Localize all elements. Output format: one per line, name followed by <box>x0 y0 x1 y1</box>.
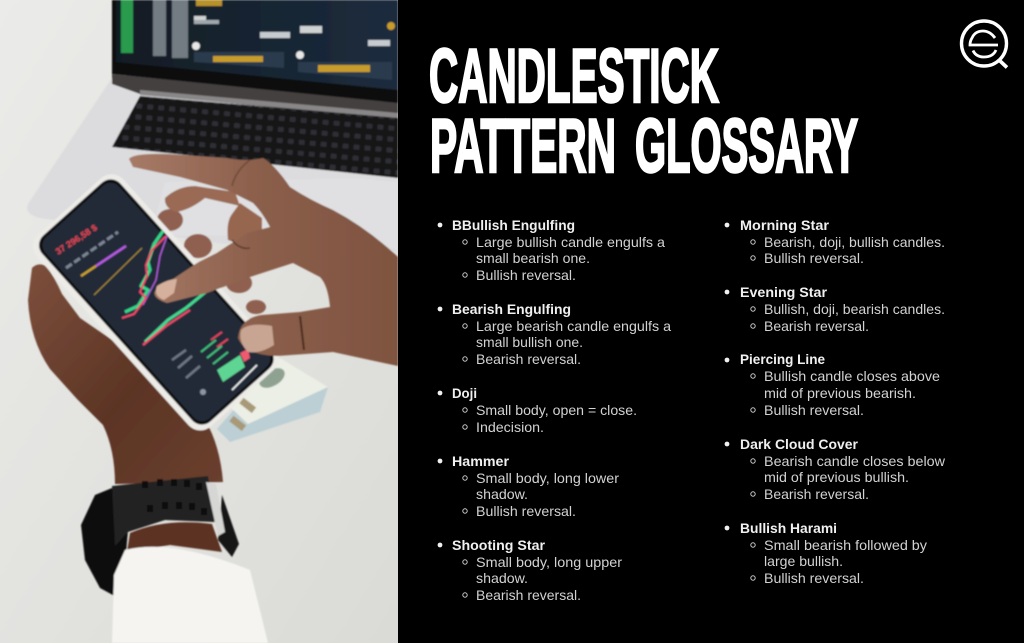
phone indicator labels <box>81 266 96 276</box>
entry: Bearish Engulfing: Bearish reversal. <box>476 351 581 367</box>
entry: Hammer <box>438 453 619 519</box>
entry: Bullish Harami: Small bearish followed by <box>764 537 927 553</box>
phone candlestick chart <box>94 231 208 345</box>
entry: Dark Cloud Cover: mid of previous bullish. <box>764 469 909 485</box>
entry: Bearish Engulfing: small bullish one. <box>476 334 583 350</box>
entry: Bullish Engulfing: small bearish one. <box>476 250 590 266</box>
entry: Bullish Engulfing: Large bullish candle engulfs a <box>476 234 665 250</box>
entry: Bullish Engulfing: Bullish reversal. <box>476 267 576 283</box>
entry: Dark Cloud Cover <box>725 436 946 502</box>
watch case and strap <box>81 476 239 600</box>
entry: Bullish Harami: Bullish reversal. <box>764 570 864 586</box>
entry: Shooting Star: Bearish reversal. <box>476 587 581 603</box>
entry: Bearish Engulfing <box>438 301 671 367</box>
title: CANDLESTICK <box>429 34 719 119</box>
entry: Bullish Harami <box>725 520 927 586</box>
phone order rows <box>201 332 228 364</box>
entry: Evening Star: Bearish reversal. <box>764 318 869 334</box>
entry: Dark Cloud Cover: Bearish candle closes below <box>764 453 946 469</box>
entry: Bearish Engulfing: Large bearish candle engulfs a <box>476 318 671 334</box>
entry: Bullish Engulfing <box>438 217 665 283</box>
logo: S and Q magnifier mark <box>962 21 1007 68</box>
entry: Doji: Doji <box>452 385 477 401</box>
entry: Hammer: Hammer <box>452 453 510 469</box>
entry: Hammer: Bullish reversal. <box>476 503 576 519</box>
phone buy button <box>217 355 245 382</box>
entry: Shooting Star <box>438 537 622 603</box>
desk surface <box>0 0 398 643</box>
title <box>429 34 858 189</box>
right hand with fingers on phone <box>129 154 398 366</box>
photo: hands holding phone in front of laptop <box>0 0 398 643</box>
entry: Shooting Star: shadow. <box>476 570 528 586</box>
entry: Bearish Engulfing: Bearish Engulfing <box>452 301 571 317</box>
phone toolbar labels <box>66 232 118 268</box>
left glossary column <box>438 217 671 603</box>
background fingers behind phone <box>157 209 266 314</box>
entry: Bullish Harami: large bullish. <box>764 553 843 569</box>
entry: Morning Star: Bearish, doji, bullish candles. <box>764 234 945 250</box>
right glossary column <box>725 217 946 586</box>
entry: Shooting Star: Shooting Star <box>452 537 546 553</box>
entry: Piercing Line <box>725 351 940 418</box>
phone <box>38 174 280 432</box>
banknotes <box>217 358 328 442</box>
left hand <box>28 264 223 484</box>
phone footer labels <box>172 350 200 378</box>
entry: Evening Star: Evening Star <box>740 284 828 300</box>
title: PATTERN <box>430 104 616 189</box>
entry: Piercing Line: Bullish candle closes above <box>764 368 940 384</box>
entry: Hammer: Small body, long lower <box>476 470 619 486</box>
entry: Doji: Indecision. <box>476 419 544 435</box>
entry: Bullish Engulfing: BBullish Engulfing <box>452 217 575 233</box>
white shirt sleeve <box>112 547 268 643</box>
entry: Piercing Line: Bullish reversal. <box>764 402 864 418</box>
entry: Dark Cloud Cover: Bearish reversal. <box>764 486 869 502</box>
entry: Doji: Small body, open = close. <box>476 402 637 418</box>
entry: Dark Cloud Cover: Dark Cloud Cover <box>740 436 859 452</box>
laptop hinge <box>112 74 398 120</box>
entry: Shooting Star: Small body, long upper <box>476 554 622 570</box>
entry: Morning Star <box>725 217 945 266</box>
entry: Morning Star: Bullish reversal. <box>764 250 864 266</box>
entry: Hammer: shadow. <box>476 486 528 502</box>
laptop keyboard <box>112 96 398 178</box>
lower wrist <box>127 522 222 552</box>
laptop base <box>27 78 398 252</box>
entry: Morning Star: Morning Star <box>740 217 830 233</box>
entry: Evening Star: Bullish, doji, bearish candles. <box>764 301 945 317</box>
entry: Piercing Line: mid of previous bearish. <box>764 385 916 401</box>
entry: Evening Star <box>725 284 945 334</box>
entry: Doji <box>438 385 637 435</box>
entry: Bullish Harami: Bullish Harami <box>740 520 837 536</box>
entry: Piercing Line: Piercing Line <box>740 351 825 367</box>
phone price text: 37 296,58 $ <box>54 222 99 257</box>
laptop trackpad <box>152 178 398 250</box>
laptop screen <box>112 0 398 103</box>
